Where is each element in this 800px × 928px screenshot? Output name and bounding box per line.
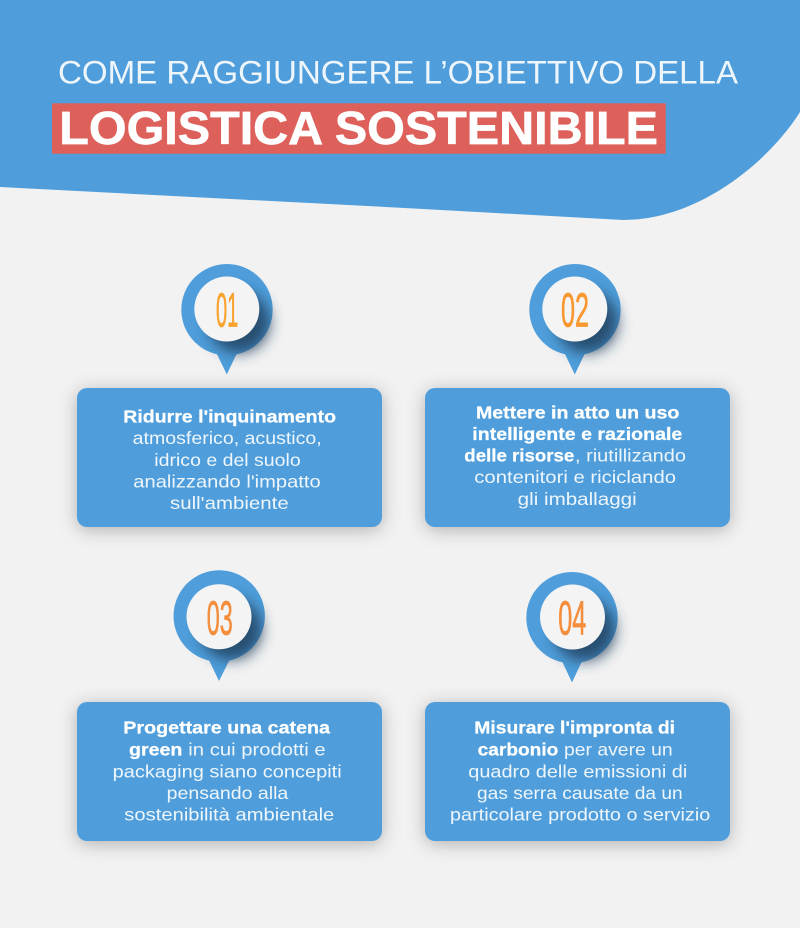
icon: pin 02 <box>529 264 621 374</box>
card 4 text: particolare prodotto o servizio <box>450 804 710 824</box>
card 4 background <box>425 702 730 841</box>
card 4 text: per avere un <box>564 740 673 760</box>
header: blue curved banner <box>0 0 800 220</box>
card 2 text: , riutillizando <box>575 446 686 466</box>
panel: card 3 <box>77 702 382 841</box>
card 2 text: Mettere in atto un uso <box>476 402 679 422</box>
card 1 text: Ridurre l'inquinamento <box>123 406 336 426</box>
icon: pin 03: 03 <box>207 593 233 646</box>
panel: card 1 <box>77 388 382 527</box>
card 3 text: green <box>129 740 182 760</box>
panel: card 2 <box>425 388 730 527</box>
card 1 background <box>77 388 382 527</box>
card 2 text: gli imballaggi <box>518 489 637 509</box>
title: highlighted second line: LOGISTICA SOSTENIBILE <box>59 102 658 154</box>
card 1 text: idrico e del suolo <box>154 450 301 470</box>
card 2 text: contenitori e riciclando <box>474 467 676 487</box>
card 1 text: atmosferico, acustico, <box>133 428 322 448</box>
card 3 text: pensando alla <box>167 783 289 803</box>
icon: pin 02: 02 <box>561 285 589 338</box>
card 4 text: Misurare l'impronta di <box>474 718 675 738</box>
card 4 text <box>450 718 710 824</box>
title: first line: COME RAGGIUNGERE L’OBIETTIVO DELLA <box>58 54 739 90</box>
card 3 text: packaging siano concepiti <box>113 761 342 781</box>
panel: card 4 <box>425 702 730 841</box>
card 3 text <box>113 718 342 824</box>
card 2 text <box>464 402 686 509</box>
card 4 text: gas serra causate da un <box>477 783 683 803</box>
card 4 text: quadro delle emissioni di <box>468 761 687 781</box>
card 3 background <box>77 702 382 841</box>
card 4 text: carbonio <box>478 740 558 760</box>
card 2 text: delle risorse <box>464 446 575 466</box>
icon: pin 01: 01 <box>216 285 238 338</box>
card 1 text: sull'ambiente <box>170 493 289 513</box>
icon: pin 01 <box>181 264 273 374</box>
card 3 text: sostenibilità ambientale <box>124 804 334 824</box>
card 2 text: intelligente e razionale <box>472 424 683 444</box>
icon: pin 04: 04 <box>558 593 586 646</box>
card 1 text <box>123 406 336 513</box>
icon: pin 04 <box>526 572 618 682</box>
card 2 background <box>425 388 730 527</box>
icon: pin 03 <box>174 570 265 681</box>
card 3 text: in cui prodotti e <box>188 740 326 760</box>
card 1 text: analizzando l'impatto <box>133 472 321 492</box>
card 3 text: Progettare una catena <box>123 718 330 738</box>
